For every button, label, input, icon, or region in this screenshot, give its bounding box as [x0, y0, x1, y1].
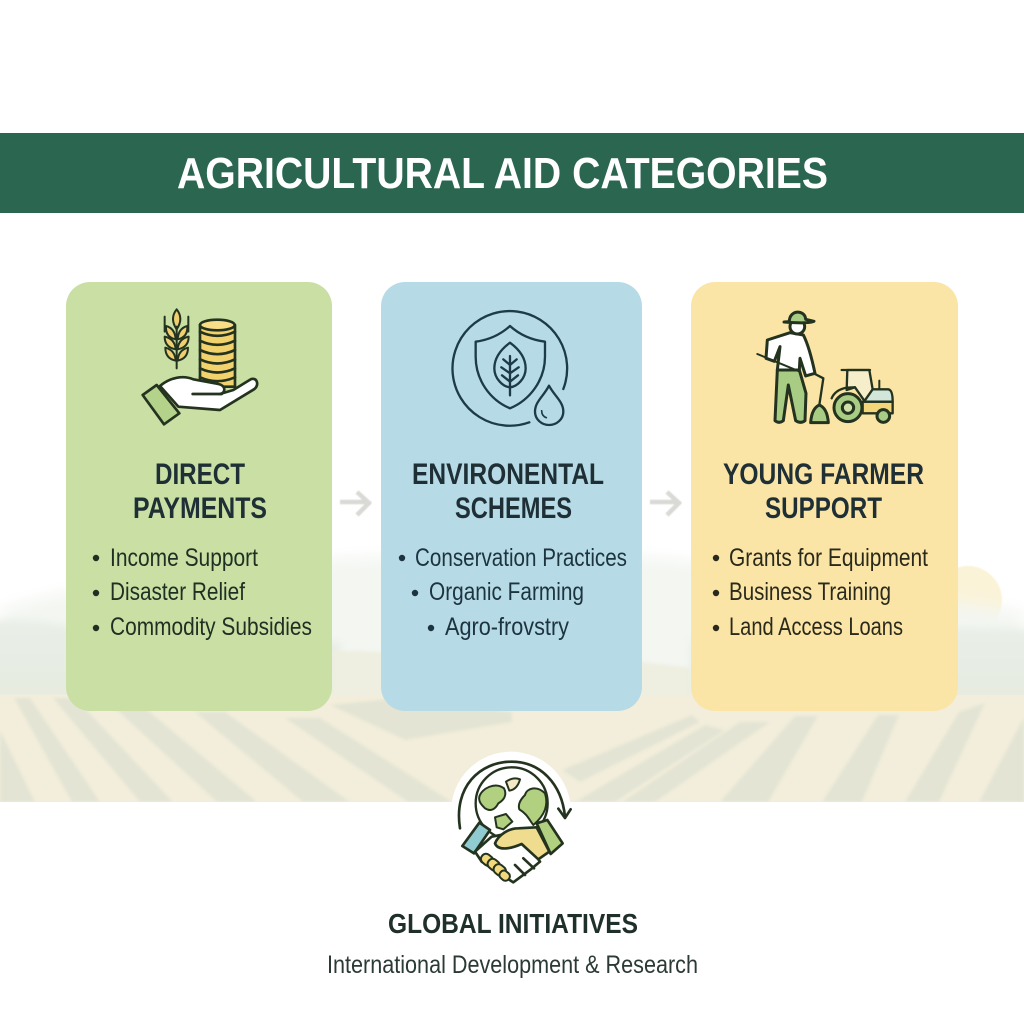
list: environmental schemes [399, 544, 627, 641]
icon: shield, leaf and water drop [452, 311, 567, 426]
panel: direct payments [66, 282, 332, 711]
list: direct payments: Income Support [110, 544, 258, 572]
heading: environmental schemes: ENVIRONENTAL [412, 458, 604, 491]
arrow: environmental to young farmer [650, 492, 679, 515]
background: farm landscape [0, 557, 1024, 802]
icon: farmer with shovel and tractor [757, 312, 893, 423]
heading: young farmer support [723, 458, 924, 525]
heading: direct payments [133, 458, 267, 525]
title banner [0, 133, 1024, 213]
list: direct payments: Disaster Relief [110, 578, 245, 606]
heading: young farmer support: YOUNG FARMER [723, 458, 924, 491]
list: environmental schemes: Agro-frovstry [445, 613, 569, 641]
heading: direct payments: PAYMENTS [133, 492, 267, 525]
arrow: direct to environmental [340, 492, 369, 515]
panel: environmental schemes [381, 282, 642, 711]
list: young farmer support: Grants for Equipment [729, 544, 928, 572]
list: environmental schemes: Conservation Practices [415, 544, 627, 572]
heading: environmental schemes [412, 458, 604, 525]
list: direct payments: Commodity Subsidies [110, 613, 312, 641]
subheading: international development and research: International Development & Research [327, 951, 698, 979]
panel: young farmer support [691, 282, 958, 711]
heading: environmental schemes: SCHEMES [455, 492, 572, 525]
list: young farmer support [713, 544, 928, 641]
list: young farmer support: Business Training [729, 578, 891, 606]
title: AGRICULTURAL AID CATEGORIES [177, 149, 828, 198]
list: young farmer support: Land Access Loans [729, 613, 903, 641]
heading: young farmer support: SUPPORT [765, 492, 882, 525]
heading: global initiatives: GLOBAL INITIATIVES [388, 908, 638, 939]
icon: globe and handshake [451, 752, 571, 882]
list: environmental schemes: Organic Farming [429, 578, 584, 606]
list: direct payments [93, 544, 312, 641]
icon: hand holding coins and wheat [143, 309, 257, 424]
heading: direct payments: DIRECT [155, 458, 245, 491]
